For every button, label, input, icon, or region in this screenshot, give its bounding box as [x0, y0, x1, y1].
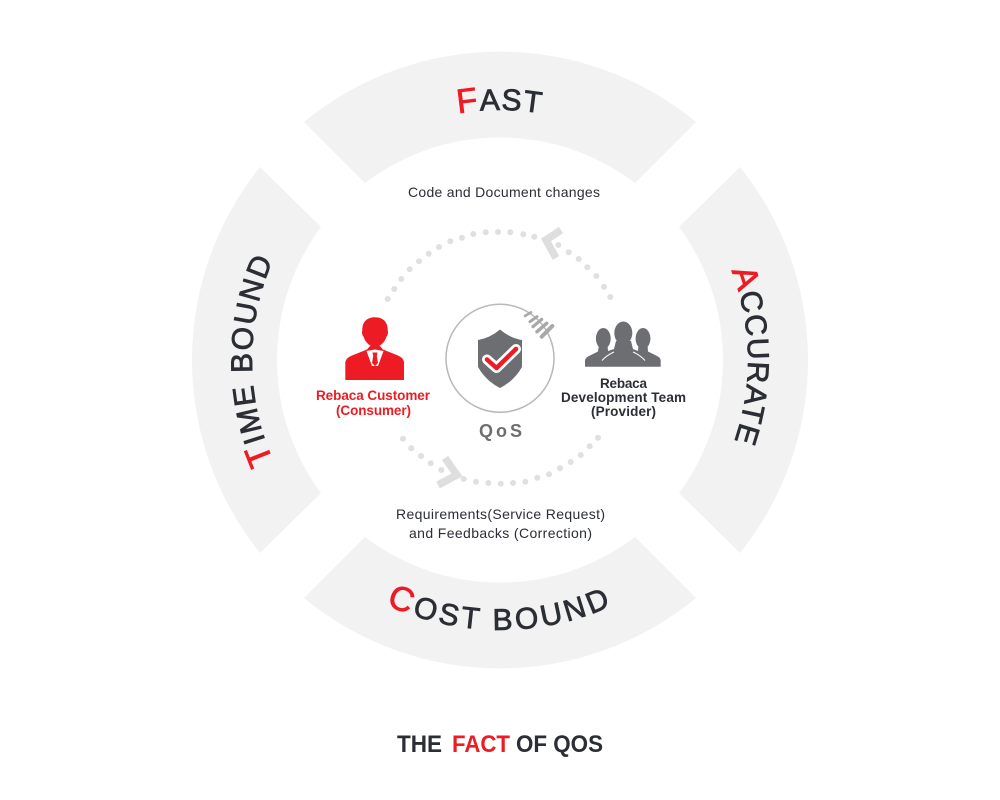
label: customer	[316, 388, 431, 418]
icon: signal ticks	[525, 312, 552, 337]
heading: Accurate: ACCURATE	[731, 270, 770, 446]
arrow: top dotted arc	[385, 229, 613, 302]
label: development team: Development Team	[561, 390, 686, 405]
label: development team: Rebaca	[600, 376, 647, 391]
label: development team	[561, 376, 686, 419]
label: customer: (Consumer)	[336, 403, 411, 418]
label: code and document changes: Code and Document changes	[408, 184, 600, 200]
label: QoS: QoS	[479, 421, 522, 441]
heading: Fast: FAST	[457, 87, 543, 114]
title	[397, 731, 603, 758]
panel: Fast segment	[304, 52, 696, 183]
icon: shield	[478, 330, 522, 388]
label: requirements and feedbacks	[396, 506, 605, 541]
icon: customer	[345, 317, 404, 380]
icon: QoS badge	[446, 304, 554, 412]
label: requirements and feedbacks: and Feedbacks (Correction)	[409, 525, 592, 541]
heading: Cost Bound: COST BOUND	[390, 586, 608, 630]
label: requirements and feedbacks: Requirements(Service Request)	[396, 506, 605, 522]
arrow: bottom dotted arc	[400, 435, 601, 487]
heading: Time Bound: TIME BOUND	[231, 256, 271, 470]
icon: development team	[585, 322, 661, 367]
label: development team: (Provider)	[591, 404, 656, 419]
label: customer: Rebaca Customer	[316, 388, 431, 403]
title: OF QOS	[516, 731, 603, 758]
panel: Cost Bound segment	[304, 538, 696, 668]
title: FACT	[452, 731, 510, 758]
panel: Accurate segment	[679, 168, 808, 552]
icon: check mark	[487, 349, 516, 368]
title: THE	[397, 731, 442, 758]
panel: Time Bound segment	[192, 168, 321, 552]
